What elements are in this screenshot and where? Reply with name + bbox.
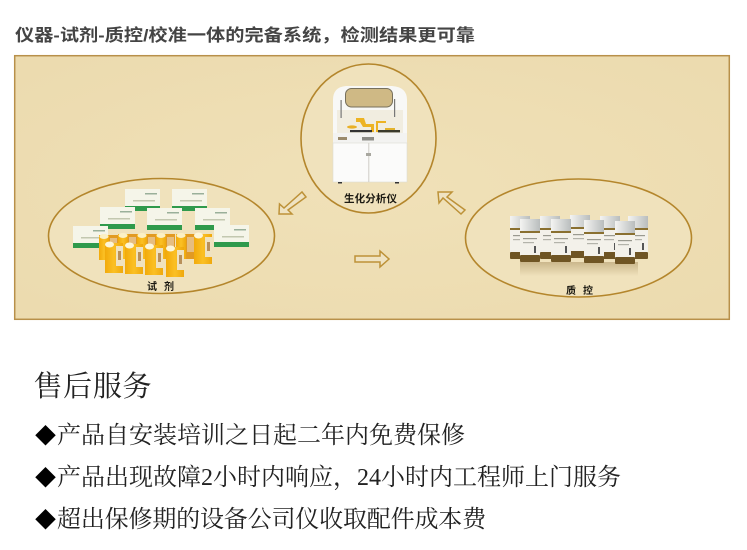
service item 2: 产品出现故障2小时内响应，24小时内工程师上门服务 <box>57 464 621 491</box>
reagent group <box>48 178 274 294</box>
label: quality control: 质控 <box>566 284 593 297</box>
heading: 仪器-试剂-质控/校准一体的完备系统，检测结果更可靠 <box>15 25 475 45</box>
icon: vials shadow <box>520 262 638 276</box>
arrow: quality control to analyzer <box>438 192 465 214</box>
arrow: analyzer to reagent <box>279 192 306 214</box>
service item 2: ◆ <box>35 466 56 490</box>
icon: reagent bottles <box>99 232 212 277</box>
service item 3: ◆ <box>35 508 56 532</box>
label: analyzer: 生化分析仪 <box>344 192 398 205</box>
analyzer group <box>301 64 436 213</box>
label: reagent: 试剂 <box>147 280 174 293</box>
service item 1: ◆ <box>35 424 56 448</box>
after-sales section <box>34 370 621 533</box>
icon: reagent boxes <box>73 189 249 248</box>
icon: analyzer machine <box>333 86 407 184</box>
heading: after-sales service: 售后服务 <box>34 370 152 403</box>
panel: system diagram <box>15 56 729 319</box>
quality control group <box>466 179 692 297</box>
icon: control vials <box>510 215 648 264</box>
service item 1: 产品自安装培训之日起二年内免费保修 <box>57 422 465 449</box>
arrow: reagent to quality control <box>355 251 389 267</box>
service item 3: 超出保修期的设备公司仪收取配件成本费 <box>57 506 487 533</box>
